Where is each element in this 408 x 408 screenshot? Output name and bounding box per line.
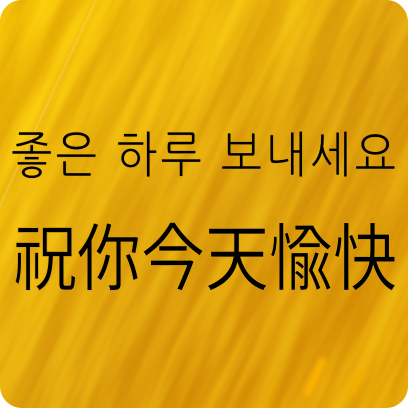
- heading: Korean greeting: 좋은 하루 보내세요: [11, 128, 396, 183]
- heading: Chinese greeting: 祝你今天愉快: [13, 218, 397, 300]
